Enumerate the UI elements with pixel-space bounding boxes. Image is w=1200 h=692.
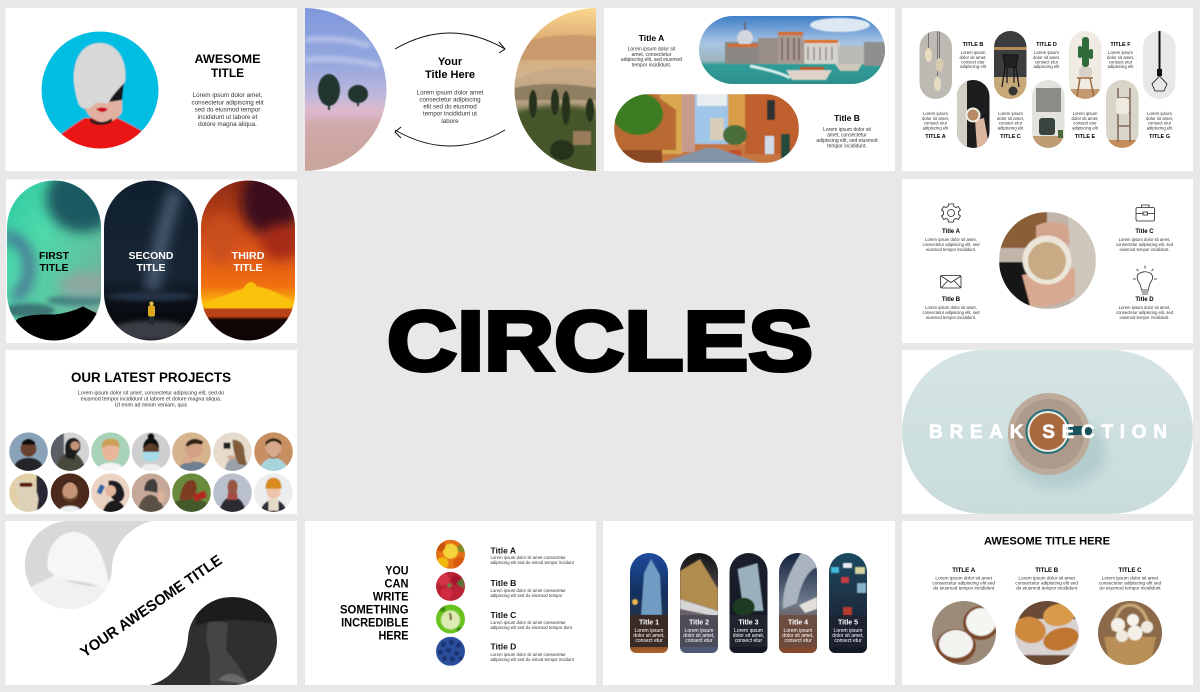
arch 4: dolor sit amet, [782,633,814,639]
column C text: do eiusmod tempor incididunt [1099,586,1161,590]
labels above: dolor sit amet, [1033,55,1060,60]
body text [417,90,484,125]
labels above: adipiscing elit [1108,64,1134,69]
avatar 13 [212,473,252,513]
item: title D: adipiscing elit sed do eimod tempor incidunt [490,657,575,662]
arch 4: consect etur [784,638,812,644]
column B text: do eiusmod tempor incididunt [1016,586,1078,590]
labels below: TITLE G [1149,134,1170,140]
labels below: consect etur [1148,120,1172,126]
labels above: adipiscing elit [1034,64,1060,69]
arrow: top curved [395,33,505,53]
item: title B: Title B [490,578,516,588]
text: first title: FIRST [39,250,70,262]
icon: envelope [940,276,961,288]
shape photo: woman in hat [148,595,280,687]
text: title A: consectetur adipiscing elit, sed [922,242,980,247]
statement text [340,566,409,642]
statement text: WRITE [373,592,409,604]
heading [425,56,475,81]
portrait circle [41,31,160,150]
arch 2: consect etur [685,638,713,644]
arrow: bottom curved [395,127,505,146]
body text: tempor incididunt ut [423,110,477,118]
labels below: adipiscing elit [1147,126,1173,130]
labels above: TITLE F [1110,42,1131,48]
item: title C: adipiscing elit sed do eiusmod tempor dunt [490,625,573,630]
text: title B: consectetur adipiscing elit, sed [922,310,980,315]
avatar 11 [131,473,171,513]
heading: Title Here [425,69,475,81]
arch 3: consect etur [735,638,762,644]
pill 7: hanging bulb [1143,31,1176,99]
pill 6: ladder with towel [1106,80,1139,148]
column C text: TITLE C [1118,567,1142,574]
labels below: consect etur [999,120,1023,126]
text: title A: Lorem ipsum dolor sit [628,46,676,52]
heading: TITLE [211,66,244,80]
arch 4: Title 4 [788,620,808,626]
text: title C: Title C [1135,229,1154,235]
arch 4 [779,553,817,653]
panel: your awesome title [6,521,297,687]
avatar 6 [212,432,252,472]
arch 5: Lorem ipsum [834,628,862,634]
labels below: adipiscing elit [923,126,949,130]
text: title A: Title A [639,33,664,43]
column B text [1015,567,1078,590]
column A text: TITLE A [952,567,975,574]
text: title B: Lorem ipsum dolor sit [823,127,872,133]
title: rotated: YOUR AWESOME TITLE [77,552,225,661]
text: title A [621,33,682,68]
panel: venice pills [604,8,895,171]
arch 3 [730,553,768,653]
column B text: Lorem ipsum dolor sit amet [1018,576,1076,580]
photo circle: mushroom basket [1097,600,1163,666]
text: third title: TITLE [234,262,262,274]
column A text: do eiusmod tempor incididunt [933,586,995,590]
arch 2: dolor sit amet, [683,633,715,639]
avatar 9 [50,473,90,513]
heading: Your [438,56,463,68]
text: title D: Title D [1135,297,1154,303]
text: title B: Lorem ipsum dolor sit amet, [925,305,977,310]
labels below: dolor sit amet, [997,116,1024,121]
text: title C: Lorem ipsum dolor sit amet, [1119,237,1170,242]
panel: five city arches [603,521,895,685]
text: first title [39,250,70,274]
statement text: INCREDIBLE [341,618,409,630]
panel: awesome title here [902,521,1193,685]
icon: gear [942,204,960,222]
body text: sed do eiusmod tempor [195,106,260,114]
labels below: dolor sit amet, [1146,116,1173,121]
labels below: adipiscing elit [1072,126,1099,130]
pill photo: coffee cup on mint [902,350,1193,514]
labels below: adipiscing elit [998,126,1024,130]
text: title B: tempor incididunt. [827,144,867,150]
panel: awesome title portrait [6,8,297,171]
labels above: consect etur [1035,60,1059,64]
text: title A [922,229,980,252]
panel: coffee with icons [902,179,1193,343]
statement text: HERE [378,630,409,642]
item: title A: Title A [490,546,516,556]
column C text: consectetur adipiscing elit sed [1099,580,1162,586]
column A text [932,567,995,590]
body text: eiusmod tempor incididunt ut labore et dolore magna aliqua. [81,396,221,402]
item: title C [490,610,573,630]
body text: consectetur adipiscing [419,96,481,104]
text: title D [1116,297,1174,320]
labels above: Lorem ipsum [961,50,986,55]
column A text: Lorem ipsum dolor sit amet [935,576,993,580]
text: title B: adipiscing elit, sed eiusmod [816,138,878,144]
labels above: TITLE B [963,42,983,48]
arch 1: consect etur [635,638,663,644]
panel: you can write [305,521,596,685]
labels above: Lorem ipsum [1108,50,1133,55]
panel: three tall pills [6,180,297,343]
arch 2: Lorem ipsum [685,628,713,634]
text: title C [1116,229,1174,252]
body text: Ut enim ad minim veniam, quis [115,402,188,408]
labels below: dolor sit amet, [922,116,949,121]
labels above: consect etur [961,60,985,64]
pill: aurora [7,180,101,340]
item: title A: Lorem ipsum dolor sit amet consectetur [490,555,566,560]
text: title A: tempor incididunt. [632,62,671,68]
pill 2: coffee on dark coat [957,80,990,148]
coffee circle photo [999,212,1096,309]
text: title B: Title B [942,297,961,303]
shape photo: white hair [20,521,155,612]
arch 2: Title 2 [689,620,709,626]
panel: break section [902,350,1193,514]
arch 1: Lorem ipsum [635,628,663,634]
arch 4: Lorem ipsum [784,628,812,634]
pill 1: jar lights [920,31,952,99]
text: title C: consectetur adipiscing elit, sed [1116,242,1174,247]
panel: our latest projects [6,350,297,514]
arch 1 [630,553,668,653]
body text: Lorem ipsum dolor sit amet, consectetur adipiscing elit, sed do [78,390,224,396]
text: second title: TITLE [136,262,166,274]
text: second title: SECOND [128,250,174,262]
item: title C: Lorem ipsum dolor sit amet consectetur [490,620,566,625]
avatar 5 [172,432,212,472]
arch 3: Title 3 [738,620,759,626]
arch 1: dolor sit amet, [633,633,665,639]
fruit circle: blueberries [436,636,466,666]
labels below: Lorem ipsum [998,111,1023,116]
labels below: consect etur [1073,120,1097,126]
item: title A [490,546,575,565]
avatar 14 [254,473,294,513]
labels below: TITLE A [925,134,946,140]
body text [191,92,264,128]
text: second title [128,250,174,274]
icon: briefcase [1136,205,1154,221]
avatar 4 [131,432,171,472]
column B text: consectetur adipiscing elit sed [1015,580,1078,586]
heading: AWESOME [194,52,260,66]
statement text: CAN [384,578,408,590]
body text: Lorem ipsum dolor amet, [193,92,263,99]
icon: light bulb [1133,266,1157,294]
labels below: dolor sit amet, [1072,116,1098,121]
body text: dolore magna aliqua. [198,121,257,128]
labels above: dolor sit amet, [1107,55,1134,60]
half circle: tuscan valley [514,8,596,171]
text: break section: BREAK SECTION [929,422,1167,443]
body text: labore [441,118,459,125]
avatar 3 [90,432,130,472]
text: third title [232,250,265,274]
pill: milky way [104,180,198,340]
column C text [1099,567,1162,590]
statement text: YOU [385,566,408,578]
text: title D: Lorem ipsum dolor sit amet, [1119,305,1170,310]
fruit circle: strawberries [436,571,466,601]
text: title D: consectetur adipiscing elit, sed [1116,310,1174,315]
labels below: consect etur [924,120,948,126]
text: third title: THIRD [232,250,265,262]
arch 3: dolor sit amet, [733,633,764,639]
main title: CIRCLES [387,294,813,388]
arch 5 [829,553,867,653]
photo circle: coconuts [931,600,999,666]
pill: lava [201,180,295,340]
heading [194,52,260,80]
labels below: Lorem ipsum [923,111,948,116]
labels above [960,42,1134,69]
text: title B [816,113,878,150]
item: title A: adipiscing elit sed do eimod tempor incidunt [490,560,575,565]
item: title D: Title D [490,642,516,652]
avatar 2 [50,432,90,472]
text: first title: TITLE [40,262,68,274]
arch 3: Lorem ipsum [734,628,763,634]
text: title A: adipiscing elit, sed eiusmod [621,57,682,63]
body text: elit sed do eiusmod [423,104,477,110]
column C text: Lorem ipsum dolor sit amet [1102,576,1159,580]
labels above: adipiscing elit [960,64,987,69]
arch 5: Title 5 [838,620,858,626]
avatar 12 [172,473,212,513]
text: title B [922,297,980,320]
avatar 10 [90,473,130,513]
arch 2 [680,553,718,653]
pill photo: colourful street [613,93,799,163]
half circle: misty field [305,8,387,171]
panel: seven interior pills [902,8,1193,171]
text: title B: Title B [834,113,860,123]
avatar 7 [254,432,294,472]
text: title B: eiusmod tempor incididunt. [926,315,976,320]
arch 5: consect etur [834,638,862,644]
labels below [922,111,1173,140]
pill 3: chair and dark wall [994,31,1027,99]
text: title A: amet, consectetur [632,52,672,58]
labels below: TITLE E [1075,134,1096,140]
labels above: consect etur [1109,60,1133,64]
pill photo: grand canal [699,16,886,84]
statement text: SOMETHING [340,604,409,616]
item: title D: Lorem ipsum dolor sit amet consectetur [490,652,566,657]
labels above: dolor sit amet, [960,55,986,60]
avatar 1 [8,432,48,472]
body text [78,390,224,408]
text: title B: amet, consectetur [827,132,867,138]
body text: Lorem ipsum dolor amet [417,90,484,96]
labels above: TITLE D [1036,42,1057,48]
fruit circle: citrus [436,539,466,569]
labels below: Lorem ipsum [1147,111,1172,116]
item: title B [490,578,566,598]
heading: OUR LATEST PROJECTS [71,370,231,385]
pill 4: poster and green chair [1032,80,1065,148]
pill 5: cactus on stool [1069,31,1102,99]
labels above: Lorem ipsum [1034,50,1059,55]
column A text: consectetur adipiscing elit sed [932,580,995,586]
item: title C: Title C [490,610,516,620]
arch 1: Title 1 [639,620,659,626]
text: title C: eiusmod tempor incididunt. [1119,247,1170,252]
text: title A: eiusmod tempor incididunt. [926,247,976,252]
column B text: TITLE B [1035,567,1058,574]
fruit circle: apple [436,604,466,634]
body text: consectetur adipiscing elit [191,100,264,106]
text: title A: Lorem ipsum dolor sit amet, [925,237,977,242]
item: title D [490,642,575,662]
arch 5: dolor sit amet, [832,633,864,639]
item: title B: adipiscing elit sed do eiusmod tempor [490,593,563,598]
item: title B: Lorem ipsum dolor sit amet consectetur [490,588,566,593]
heading: AWESOME TITLE HERE [984,536,1110,548]
body text: incididunt ut labore et [198,114,258,121]
text: title A: Title A [942,229,961,235]
labels below: Lorem ipsum [1073,111,1098,116]
text: title D: eiusmod tempor incididunt. [1119,315,1170,320]
avatar 8 [8,473,48,513]
photo circle: croissants [1011,600,1081,666]
labels below: TITLE C [1000,134,1021,140]
panel: your title here [305,8,596,171]
